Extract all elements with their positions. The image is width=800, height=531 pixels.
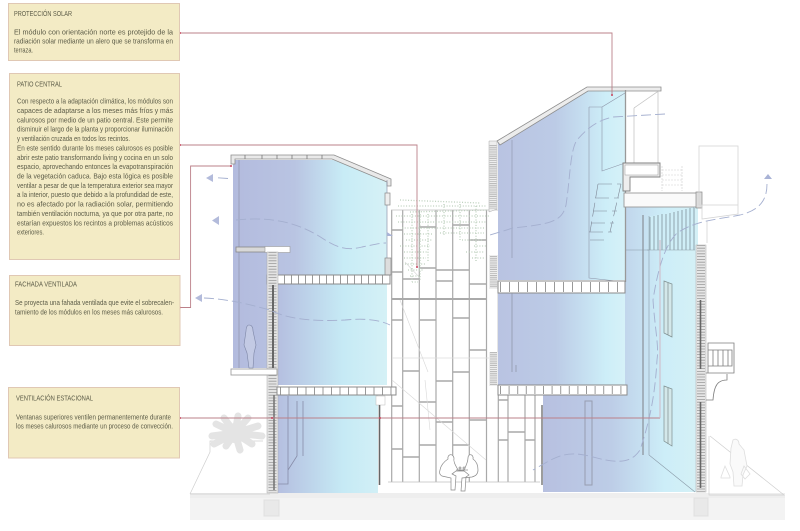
panel: patio central (10, 74, 180, 260)
neighbour building outline (699, 146, 738, 243)
ground floor partitions (278, 396, 303, 484)
upper floor volume (233, 160, 387, 368)
panel: protección solar (8, 4, 180, 60)
leader: fachada ventilada (180, 166, 231, 308)
balcony (231, 369, 277, 375)
airflow right top (490, 114, 665, 235)
text: patio central: ventilar a pesar de que la temperatura exterior sea mayor (17, 181, 173, 190)
arrowhead left middle (212, 216, 219, 225)
text: patio central: de la vegetación caduca. Bajo esta lógica es posible (17, 172, 173, 180)
text: ventilación estacional: los meses calurosos mediante un proceso de convección. (16, 422, 173, 431)
heading: patio central: PATIO CENTRAL (17, 80, 62, 88)
windows (664, 281, 672, 446)
ground floor volume (278, 395, 378, 493)
shelf (236, 246, 290, 252)
heading: ventilación estacional: VENTILACIÓN ESTACIONAL (16, 394, 93, 402)
text: patio central: calurosos por medio de un patio central. Este permite (17, 115, 173, 124)
text: protección solar: radiación solar mediante un alero que se transforma en (14, 36, 173, 46)
text: patio central: espacio, aprovechando entonces la evapotranspiración (17, 162, 173, 171)
text: protección solar: terraza. (14, 46, 33, 54)
heading: protección solar: PROTECCIÓN SOLAR (14, 9, 72, 18)
louver screen (647, 207, 695, 250)
ground and neighbour volume (543, 207, 698, 492)
person silhouette (244, 325, 256, 368)
arrowhead right (764, 174, 772, 179)
upper volume (498, 88, 625, 280)
text: patio central: también ventilación nocturna, ya que por otra parte, no (17, 209, 173, 218)
upper neighbour slab (624, 192, 702, 208)
facade louvers (489, 141, 498, 386)
airflow right long (533, 184, 767, 470)
panel: ventilación estacional (8, 388, 180, 458)
airflow left top (214, 178, 228, 179)
partition stub (512, 293, 516, 372)
lower slab (498, 385, 627, 395)
heading: fachada ventilada: FACHADA VENTILADA (15, 280, 77, 288)
arrowhead left lower (195, 294, 202, 302)
text: patio central: abrir este patio transformando living y cocina en un solo (17, 153, 173, 162)
leader lines (180, 33, 660, 418)
text: patio central: Con respecto a la adaptación climática, los módulos son (17, 97, 173, 106)
middle slab (277, 387, 396, 395)
window column (239, 160, 387, 368)
airflow arrows (204, 114, 767, 470)
text: ventilación estacional (16, 412, 173, 431)
airflow left middle (236, 219, 386, 249)
overhang outline (634, 92, 658, 164)
leader dots (179, 32, 613, 419)
people at table (440, 455, 478, 491)
column (585, 401, 592, 485)
roof (497, 87, 661, 145)
text: ventilación estacional: Ventanas superiores ventilen permanentemente durante (16, 412, 171, 421)
text: patio central: En este sentido durante los meses calurosos es posible (17, 143, 173, 152)
text: patio central: a la interior, puesto que debido a la profundidad de este, (17, 190, 173, 199)
left garden plant (212, 416, 262, 450)
neighbour balcony (706, 343, 734, 400)
text: fachada ventilada: Se proyecta una fahada ventilada que evite el sobrecalen- (15, 298, 174, 307)
vegetation (396, 200, 489, 282)
ground (190, 436, 785, 520)
text: patio central: exteriores. (17, 228, 44, 237)
interior partition (642, 215, 644, 455)
text: protección solar: El módulo con orientación norte es protejido de la (14, 28, 174, 36)
airflow left lower (204, 298, 390, 325)
leader: protección solar (180, 33, 612, 95)
arrowhead patio (387, 232, 393, 236)
right module (489, 87, 738, 492)
panel: fachada ventilada (10, 276, 180, 346)
text: fachada ventilada (15, 298, 174, 316)
middle volume (498, 293, 625, 385)
leader: patio central (180, 145, 417, 267)
right brick wall (696, 245, 706, 492)
middle floor volume (277, 284, 387, 385)
roof ribs (245, 155, 322, 159)
terrace railing (662, 166, 682, 191)
text: patio central: y ventilación cruzada en todos los recintos. (17, 134, 130, 143)
text: patio central: disminuir el largo de la planta y proporcionar iluminación (17, 125, 173, 134)
terrace slab (623, 163, 660, 191)
text: protección solar (14, 28, 174, 54)
central patio lattice (388, 210, 540, 482)
text: patio central: no es afectado por la radiación solar, permitiendo (17, 200, 173, 209)
arrowhead left top (206, 174, 213, 182)
middle slab (498, 281, 625, 293)
left module (231, 155, 396, 493)
glazing line (541, 405, 543, 485)
leader: ventilación estacional vertical (659, 240, 661, 418)
pedestrian with bags (721, 439, 750, 486)
roof (231, 155, 391, 186)
glazed door (376, 396, 385, 485)
inner stair walls (512, 93, 625, 282)
text: fachada ventilada: tamiento de los módulos en los meses más calurosos. (15, 307, 163, 316)
leader: ventilación estacional (180, 417, 660, 419)
text: patio central (17, 97, 173, 237)
text: patio central: capaces de adaptarse a los meses más fríos y más (17, 106, 173, 115)
upper slab (267, 275, 390, 284)
stair (589, 184, 621, 240)
brick wall (267, 252, 278, 493)
text: patio central: estarían expuestos los recintos a problemas acústicos (17, 218, 173, 227)
